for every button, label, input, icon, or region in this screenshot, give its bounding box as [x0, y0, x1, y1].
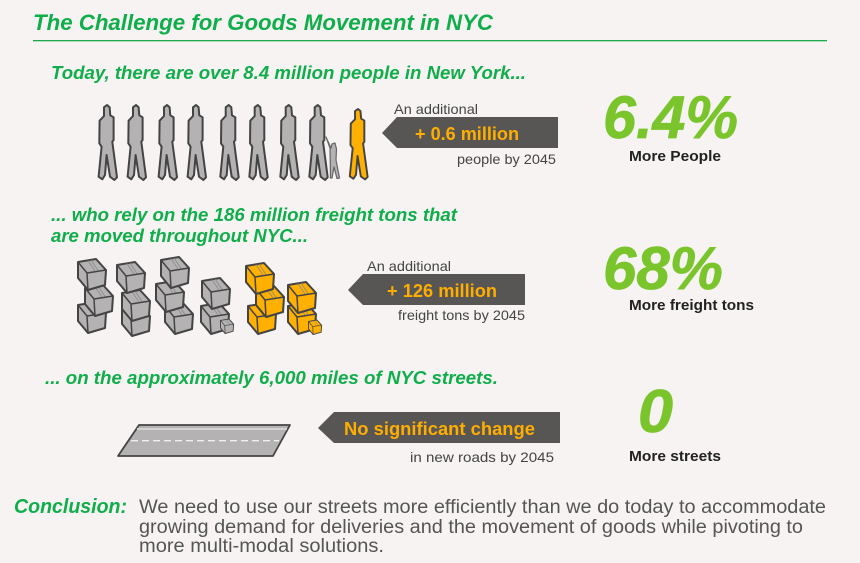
callout: people arrow: people by 2045	[457, 151, 556, 167]
callout: freight arrow: + 126 million	[387, 281, 497, 301]
stat: streets: More streets	[629, 448, 721, 465]
callout: streets arrow: in new roads by 2045	[410, 449, 554, 465]
callout: freight arrow	[348, 258, 525, 323]
stat: streets: 0	[638, 378, 673, 445]
stat: streets	[629, 378, 721, 465]
callout: streets arrow	[318, 412, 560, 465]
stat: freight: More freight tons	[629, 297, 754, 314]
callout: streets arrow: No significant change	[344, 419, 535, 439]
title: The Challenge for Goods Movement in NYC	[33, 10, 494, 35]
conclusion: more multi-modal solutions.	[139, 536, 384, 557]
conclusion: growing demand for deliveries and the movement of goods while pivoting to	[139, 517, 803, 538]
callout: freight arrow: freight tons by 2045	[398, 307, 525, 323]
callout: people arrow: + 0.6 million	[415, 124, 519, 144]
stat: people: More People	[629, 148, 721, 165]
icon row: freight boxes	[78, 257, 322, 336]
conclusion	[14, 496, 826, 557]
callout: people arrow	[382, 101, 558, 167]
heading: freight: ... who rely on the 186 million freight tons that	[51, 204, 458, 225]
icon: road	[118, 425, 290, 456]
heading: streets: ... on the approximately 6,000 miles of NYC streets.	[45, 367, 498, 388]
stat: freight	[603, 235, 754, 314]
text: are moved throughout NYC...	[51, 225, 308, 246]
heading: people: Today, there are over 8.4 million people in New York...	[51, 62, 526, 83]
icon row: people	[99, 105, 368, 180]
stat: people: 6.4%	[603, 84, 738, 151]
conclusion: We need to use our streets more efficiently than we do today to accommodate	[139, 497, 826, 518]
callout: freight arrow: An additional	[367, 258, 451, 274]
callout: people arrow: An additional	[394, 101, 478, 117]
stat: freight: 68%	[603, 235, 723, 302]
conclusion: Conclusion:	[14, 496, 127, 518]
